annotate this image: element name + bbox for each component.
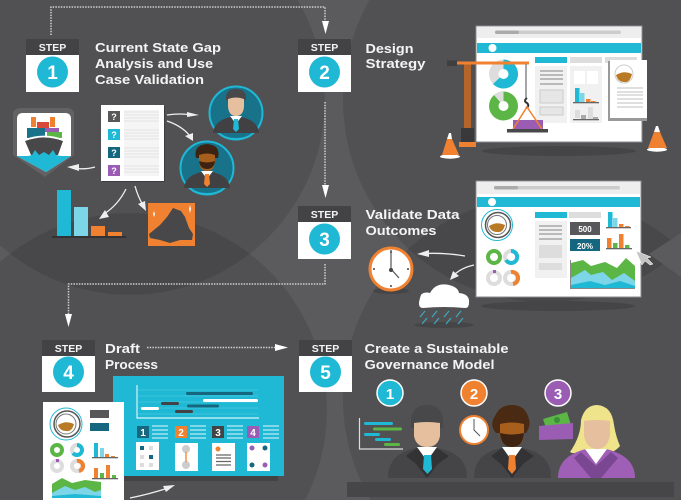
step 3 card: 3 [319, 230, 330, 251]
person 2 [474, 405, 551, 478]
person 1 [388, 405, 467, 478]
arrow: dashboard to cloud [450, 265, 474, 280]
questionnaire document: ? [111, 166, 117, 176]
step 4 card: 4 [63, 363, 74, 384]
icon: cursor [636, 251, 653, 265]
step 2 card: STEP [311, 42, 338, 54]
arrow: sheet to panel [130, 485, 175, 498]
data sheet [43, 402, 124, 500]
questionnaire document: ? [111, 148, 117, 158]
icon: bearded person in circle [180, 142, 234, 194]
icon: clock [370, 248, 412, 294]
process panel [113, 376, 284, 481]
step 2 heading: Strategy [366, 56, 426, 71]
badge 3 [545, 380, 571, 406]
questionnaire document: ? [111, 112, 117, 122]
document on dashboard [608, 60, 647, 121]
step 3 heading [366, 207, 460, 238]
step 1 heading [95, 40, 221, 87]
badge 2 [461, 380, 487, 406]
icon: cargo ship badge [13, 108, 74, 177]
governance base bar [347, 482, 674, 497]
process panel: 2 [178, 428, 184, 439]
icon: left traffic cone [440, 133, 460, 159]
dashboard: design strategy [476, 26, 642, 156]
step 3 heading: Outcomes [366, 223, 436, 238]
step 1 heading: Analysis and Use [95, 56, 213, 71]
process panel: 3 [215, 428, 221, 439]
badge 1: 1 [386, 386, 394, 403]
icon: rain cloud [414, 284, 474, 328]
arrow: step 2 to step 3 [322, 102, 329, 198]
step 5 card: 5 [320, 363, 331, 384]
dashboard: validate data: 500 [578, 225, 592, 234]
process panel: 4 [250, 428, 256, 439]
step 1 card [26, 39, 79, 92]
step 4 heading: Process [105, 357, 158, 372]
arrows from document [67, 112, 199, 219]
badge 2: 2 [470, 386, 478, 403]
step 3 heading: Validate Data [366, 207, 460, 222]
step 4 heading: Draft [105, 341, 141, 356]
icon: right traffic cone [647, 126, 667, 152]
dashboard: validate data: 20% [577, 242, 593, 251]
bar chart [52, 190, 126, 238]
arrow: step 4 to step 5 [147, 344, 288, 351]
step 1 card: 1 [47, 63, 58, 84]
step 4 heading [105, 341, 158, 372]
step 4 card [42, 340, 95, 392]
arrow: step 3 to step 4 [65, 264, 325, 327]
person 3 [558, 405, 635, 478]
step 5 card [299, 340, 352, 392]
icon: wallet with money [539, 412, 573, 440]
step 5 heading [364, 341, 508, 372]
step 3 card: STEP [311, 209, 338, 221]
arrow: step 1 to step 2 [51, 7, 329, 35]
icon: person in circle [210, 86, 262, 140]
badge 3: 3 [554, 386, 562, 403]
questionnaire document: ? [111, 130, 117, 140]
process panel: 1 [140, 428, 146, 439]
gantt icon [360, 418, 403, 449]
icon: clock small [460, 416, 488, 444]
step 4 card: STEP [55, 343, 82, 355]
step 5 heading: Create a Sustainable [364, 341, 508, 356]
step 1 heading: Case Validation [95, 72, 204, 87]
arrow: dashboard to clock [417, 250, 465, 257]
step 1 heading: Current State Gap [95, 40, 221, 55]
questionnaire document [101, 105, 165, 182]
step 1 card: STEP [39, 42, 66, 54]
step 5 card: STEP [312, 343, 339, 355]
dashboard: validate data [476, 181, 641, 311]
icon: coal rock [148, 203, 195, 246]
step 2 heading: Design [366, 41, 414, 56]
step 5 heading: Governance Model [364, 357, 494, 372]
step 2 card [298, 39, 351, 92]
badge 1 [377, 380, 403, 406]
step 2 card: 2 [319, 63, 330, 84]
step 2 heading [366, 41, 426, 71]
icon: crane [447, 60, 548, 147]
step 3 card [298, 206, 351, 259]
